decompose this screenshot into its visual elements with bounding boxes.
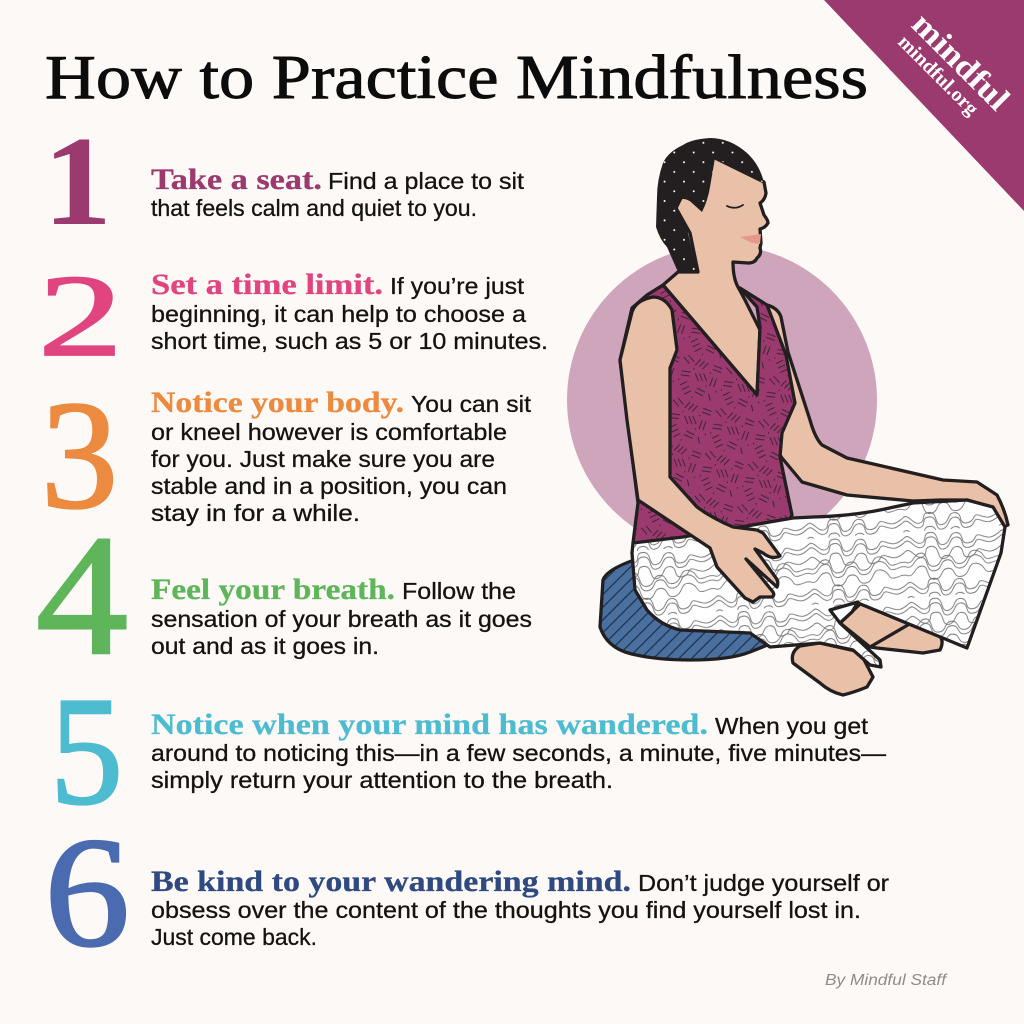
back foot and shadow xyxy=(840,604,967,653)
step 2: 2 xyxy=(38,251,123,381)
step 1 xyxy=(43,110,525,252)
head and neck xyxy=(663,158,768,395)
figure: meditating woman xyxy=(600,138,1008,695)
step 2: beginning, it can help to choose a xyxy=(151,301,526,327)
step 3 xyxy=(41,370,532,541)
step 1: that feels calm and quiet to you. xyxy=(151,195,477,221)
step 3: stay in for a while. xyxy=(151,500,360,526)
step 6: Be kind to your wandering mind. xyxy=(151,865,631,898)
step 5: simply return your attention to the breath. xyxy=(151,767,613,793)
step 6: obsess over the content of the thoughts you find yourself lost in. xyxy=(151,897,861,923)
step 4 xyxy=(36,499,532,691)
step 1: Take a seat. xyxy=(151,163,322,196)
step 5: When you get xyxy=(715,713,869,739)
hair xyxy=(656,138,764,272)
step 5 xyxy=(50,665,886,837)
trouser flap xyxy=(830,602,858,623)
step 4: Feel your breath. xyxy=(151,573,395,606)
lips xyxy=(740,234,761,244)
step 3: or kneel however is comfortable xyxy=(151,419,507,445)
step 3: 3 xyxy=(41,370,118,541)
step 5: around to noticing this—in a few seconds, a minute, five minutes— xyxy=(151,740,886,766)
tank top xyxy=(620,285,795,545)
cushion xyxy=(600,560,770,660)
step 6: 6 xyxy=(44,805,130,979)
right arm xyxy=(767,305,1008,527)
front foot xyxy=(792,643,873,695)
step 2: Set a time limit. xyxy=(151,268,383,301)
step 3: for you. Just make sure you are xyxy=(151,446,495,472)
step 4: out and as it goes in. xyxy=(151,633,379,659)
step 5: Notice when your mind has wandered. xyxy=(151,708,708,741)
step 3: You can sit xyxy=(411,391,532,417)
step 1: Find a place to sit xyxy=(328,168,525,194)
step 1: 1 xyxy=(43,110,112,252)
left arm and hand xyxy=(620,297,780,602)
step 5: 5 xyxy=(50,665,123,837)
step 3: Notice your body. xyxy=(151,386,404,419)
byline: By Mindful Staff xyxy=(825,972,948,989)
corner banner: mindful logo xyxy=(824,0,1024,211)
background circle xyxy=(567,245,877,555)
closed eye xyxy=(727,205,743,208)
step 4: Follow the xyxy=(402,578,516,604)
step 2 xyxy=(38,251,548,381)
step 2: short time, such as 5 or 10 minutes. xyxy=(151,328,548,354)
corner banner: mindful logo: mindful xyxy=(904,6,1016,118)
step 6: Just come back. xyxy=(151,924,317,950)
step 4: sensation of your breath as it goes xyxy=(151,606,532,632)
title: How to Practice Mindfulness xyxy=(45,44,868,112)
step 6 xyxy=(44,805,889,979)
step 4: 4 xyxy=(36,499,128,691)
step 6: Don’t judge yourself or xyxy=(638,870,889,896)
step 3: stable and in a position, you can xyxy=(151,473,507,499)
step 2: If you’re just xyxy=(390,273,525,299)
patterned trousers xyxy=(632,500,1005,667)
corner banner: mindful logo: mindful.org xyxy=(893,31,983,120)
